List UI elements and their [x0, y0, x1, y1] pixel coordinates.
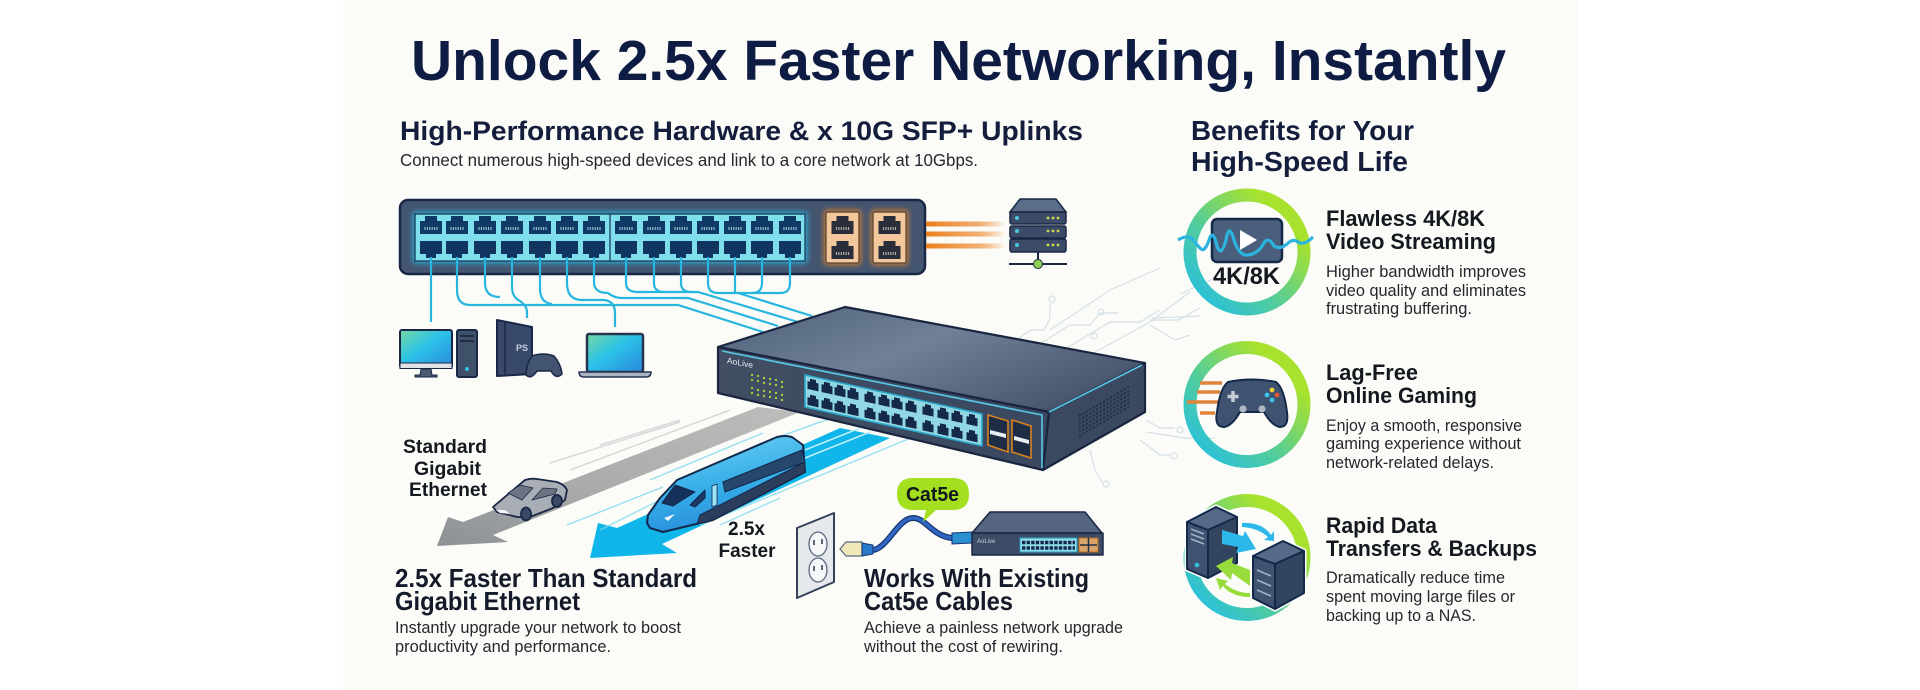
icon: desktop computer: [400, 330, 477, 377]
text block: gaming: Enjoy a smooth, responsive: [1326, 417, 1522, 435]
circuit traces behind main switch: [1010, 268, 1215, 487]
icon: Cat5e cable: [840, 518, 972, 556]
text block: data transfers: Rapid Data: [1326, 513, 1438, 538]
front RJ45 ports: [805, 375, 982, 446]
icon: data transfer servers: [1187, 500, 1304, 614]
text block: Cat5e: Cat5e Cables: [864, 586, 1013, 616]
icon: server rack: [1009, 199, 1067, 268]
callout: Cat5e: [897, 478, 969, 522]
left server: [1187, 507, 1237, 578]
switch chassis: [400, 200, 925, 274]
SFP+ uplink ports: [824, 210, 908, 265]
text block: gaming: network-related delays.: [1326, 454, 1494, 472]
text block: Cat5e: Works With Existing: [864, 563, 1089, 593]
label: 2.5x faster: Faster: [718, 541, 776, 562]
status LEDs: [751, 374, 783, 401]
label: 2.5x faster: 2.5x: [728, 519, 765, 540]
arrow: 2.5x faster road: [567, 415, 930, 558]
text block: gaming: gaming experience without: [1326, 435, 1521, 453]
RJ45 port block: [413, 212, 807, 263]
text block: data transfers: spent moving large files or: [1326, 588, 1515, 606]
text block: 2.5x faster: Gigabit Ethernet: [395, 586, 580, 616]
text block: gaming: Online Gaming: [1326, 383, 1477, 408]
text block: 2.5x faster: productivity and performance.: [395, 637, 611, 656]
text block: Cat5e: without the cost of rewiring.: [863, 637, 1063, 656]
text block: gaming: Lag-Free: [1326, 360, 1418, 385]
heading: benefits: [1191, 115, 1414, 177]
icon: game console and controller: PS: [516, 343, 528, 353]
icon: game controller: [1187, 348, 1304, 462]
text block: data transfers: [1326, 513, 1537, 625]
icon: video streaming: [1178, 195, 1313, 309]
front face: [718, 347, 1049, 470]
icon: car: [493, 479, 567, 520]
label: 2.5x faster: [718, 519, 776, 562]
text block: video streaming: video quality and eliminates: [1326, 282, 1526, 300]
text block: video streaming: frustrating buffering.: [1326, 300, 1472, 318]
front SFP ports: [988, 415, 1031, 458]
text block: Cat5e: [863, 563, 1123, 656]
icon: train: [647, 436, 805, 532]
title: Unlock 2.5x Faster Networking, Instantly: [411, 29, 1506, 93]
icon: video streaming: 4K/8K: [1213, 263, 1281, 290]
text block: 2.5x faster: 2.5x Faster Than Standard: [395, 563, 697, 593]
side vents: [1079, 387, 1129, 436]
text block: data transfers: backing up to a NAS.: [1326, 607, 1476, 625]
text block: Cat5e: Achieve a painless network upgrade: [864, 618, 1123, 637]
text block: data transfers: Transfers & Backups: [1326, 536, 1537, 561]
orange uplink lines: [926, 222, 1004, 248]
icon: game console and controller: [497, 320, 562, 377]
icon: laptop: [579, 334, 651, 377]
callout: Cat5e: Cat5e: [906, 483, 959, 506]
heading: benefits: Benefits for Your: [1191, 115, 1414, 146]
text block: video streaming: [1326, 206, 1526, 318]
panel: background: [343, 0, 1578, 690]
text block: gaming: [1326, 360, 1522, 472]
label: standard gigabit ethernet: Gigabit: [414, 459, 482, 480]
label: standard gigabit ethernet: [403, 437, 488, 501]
side face: [1043, 363, 1145, 470]
main switch: [718, 307, 1145, 470]
right server: [1253, 541, 1304, 609]
subtext: hardware section: Connect numerous high-speed devices and link to a core network at 10Gbps.: [400, 150, 978, 170]
label: standard gigabit ethernet: Ethernet: [409, 480, 488, 501]
logo: AoLive: [727, 355, 753, 370]
top face: [718, 307, 1145, 412]
text block: video streaming: Video Streaming: [1326, 229, 1496, 254]
text block: video streaming: Flawless 4K/8K: [1326, 206, 1485, 231]
text block: 2.5x faster: [395, 563, 697, 656]
top switch: [400, 200, 925, 274]
text block: 2.5x faster: Instantly upgrade your network to boost: [395, 618, 681, 637]
cables from switch ports: [431, 257, 812, 332]
text block: video streaming: Higher bandwidth improves: [1326, 263, 1526, 281]
arrow: standard gigabit road: [437, 407, 800, 546]
heading: benefits: High-Speed Life: [1191, 146, 1408, 177]
label: standard gigabit ethernet: Standard: [403, 437, 487, 458]
icon: small switch: AoLive: [977, 539, 996, 545]
icon: wall outlet: [797, 513, 834, 598]
text block: data transfers: Dramatically reduce time: [1326, 569, 1505, 587]
icon: small switch: [972, 512, 1103, 555]
transfer arrows: [1222, 530, 1256, 553]
heading: hardware section: High-Performance Hardware & x 10G SFP+ Uplinks: [400, 116, 1083, 146]
